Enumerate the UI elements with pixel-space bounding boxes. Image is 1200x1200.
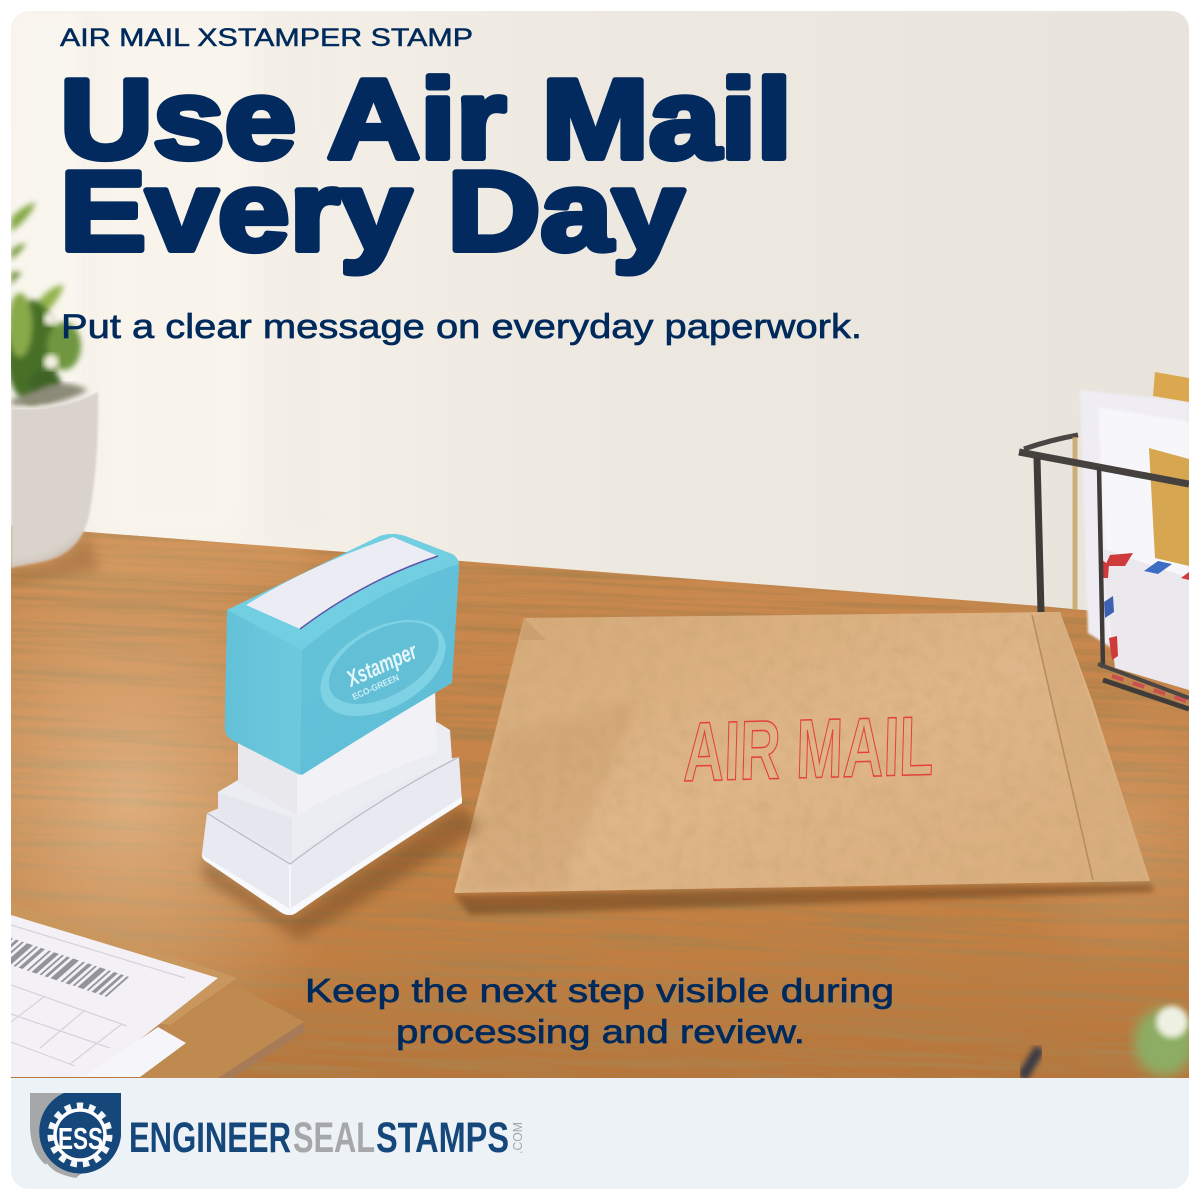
bottom caption: Keep the next step visible during	[305, 972, 894, 1009]
cap left face	[225, 610, 302, 775]
pen blur	[1022, 1048, 1040, 1078]
wall background	[11, 11, 1189, 631]
kraft envelope top	[1153, 372, 1189, 402]
middle white base	[218, 722, 452, 800]
white stem	[297, 692, 436, 812]
envelope shadow	[454, 884, 1155, 915]
outer white base	[202, 757, 462, 915]
Xstamper self-inking stamp: ECO-GREEN	[351, 672, 400, 702]
rear rail	[1024, 435, 1078, 449]
bottom caption	[305, 972, 894, 1050]
kraft envelope middle	[1149, 448, 1189, 566]
wire basket with mail	[1019, 372, 1189, 709]
.com: .COM	[510, 1122, 525, 1154]
ESS logo emblem	[30, 1093, 121, 1180]
white envelopes	[1080, 390, 1189, 660]
footer band	[11, 1078, 1189, 1189]
subheading: Put a clear message on everyday paperwork.	[61, 308, 862, 346]
left corner fold	[520, 618, 546, 640]
green blur	[1134, 1008, 1194, 1076]
document on brown folder	[0, 902, 305, 1078]
blue cap	[225, 534, 459, 775]
stamped text: AIR MAIL	[683, 698, 935, 799]
eyebrow label: AIR MAIL XSTAMPER STAMP	[60, 24, 473, 52]
cap top rim	[227, 534, 459, 650]
main headline: Every Day	[60, 148, 684, 274]
wordmark: STAMPS	[376, 1114, 509, 1162]
ESS text: ESS	[58, 1121, 103, 1156]
shaded corner	[468, 714, 622, 888]
white paper	[11, 915, 218, 1077]
pot	[11, 392, 98, 568]
brand text: Xstamper	[341, 637, 421, 692]
lower folder	[140, 996, 304, 1078]
form grid	[11, 925, 185, 1066]
oval badge	[320, 620, 446, 716]
wordmark: ENGINEER	[129, 1114, 291, 1162]
right flap	[1032, 612, 1150, 881]
white label window	[246, 537, 438, 629]
barcode	[0, 938, 129, 997]
main headline: Use Air Mail	[60, 56, 792, 182]
kraft envelope with stamped AIR MAIL	[454, 612, 1155, 915]
wooden table	[11, 526, 1189, 1078]
blurred foreground objects	[1022, 1006, 1194, 1078]
main headline	[60, 56, 792, 274]
upper folder edge	[11, 902, 237, 1025]
wordmark	[129, 1114, 509, 1162]
bottom caption: processing and review.	[396, 1013, 805, 1050]
Xstamper self-inking stamp	[202, 534, 480, 940]
basket rails	[1019, 452, 1189, 484]
base inner opening	[207, 757, 459, 864]
gear ring	[52, 1107, 108, 1163]
envelope body	[454, 612, 1150, 893]
second sheet	[84, 1027, 186, 1077]
plant in white pot	[6, 202, 100, 585]
airmail envelope	[1101, 548, 1189, 690]
stamp shadow	[202, 805, 480, 940]
wordmark: SEAL	[293, 1114, 375, 1162]
